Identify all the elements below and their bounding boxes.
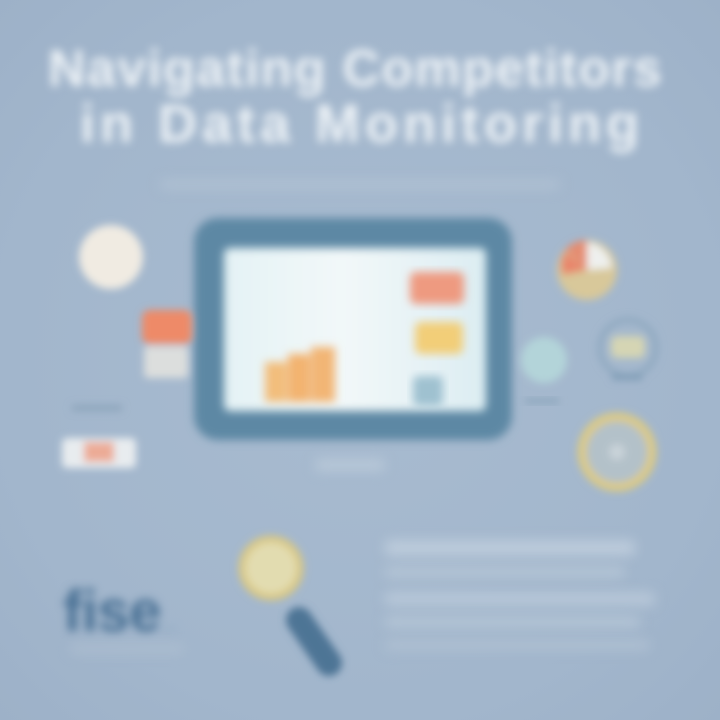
text line <box>385 540 635 556</box>
title line 2: in Data Monitoring <box>80 94 644 154</box>
icon: cream circle <box>79 225 143 289</box>
brand wordmark: fise... <box>63 579 176 644</box>
tablet screen <box>224 248 486 411</box>
title <box>46 40 664 158</box>
title line 1: Navigating Competitors <box>48 40 663 98</box>
red card <box>410 272 464 304</box>
icon: teal circle <box>521 337 567 383</box>
tablet frame <box>194 218 512 440</box>
text line <box>385 592 655 606</box>
stand label <box>315 459 385 471</box>
text line <box>385 566 625 578</box>
side label <box>525 398 559 404</box>
orange bar chart <box>265 347 335 402</box>
caption under brand <box>70 645 185 653</box>
icon: magnifying glass <box>242 539 329 663</box>
subtitle <box>160 180 560 189</box>
icon: orange card <box>142 310 192 378</box>
text line <box>385 640 650 650</box>
icon: envelope card <box>62 405 136 468</box>
text block: right column <box>384 537 654 648</box>
icon: data ring <box>600 320 656 380</box>
yellow card <box>415 322 463 354</box>
icon: gold ring <box>582 417 652 487</box>
tablet monitor <box>188 212 518 446</box>
text line <box>385 616 640 628</box>
blue card <box>413 376 443 406</box>
icon: pie chart <box>557 240 617 300</box>
